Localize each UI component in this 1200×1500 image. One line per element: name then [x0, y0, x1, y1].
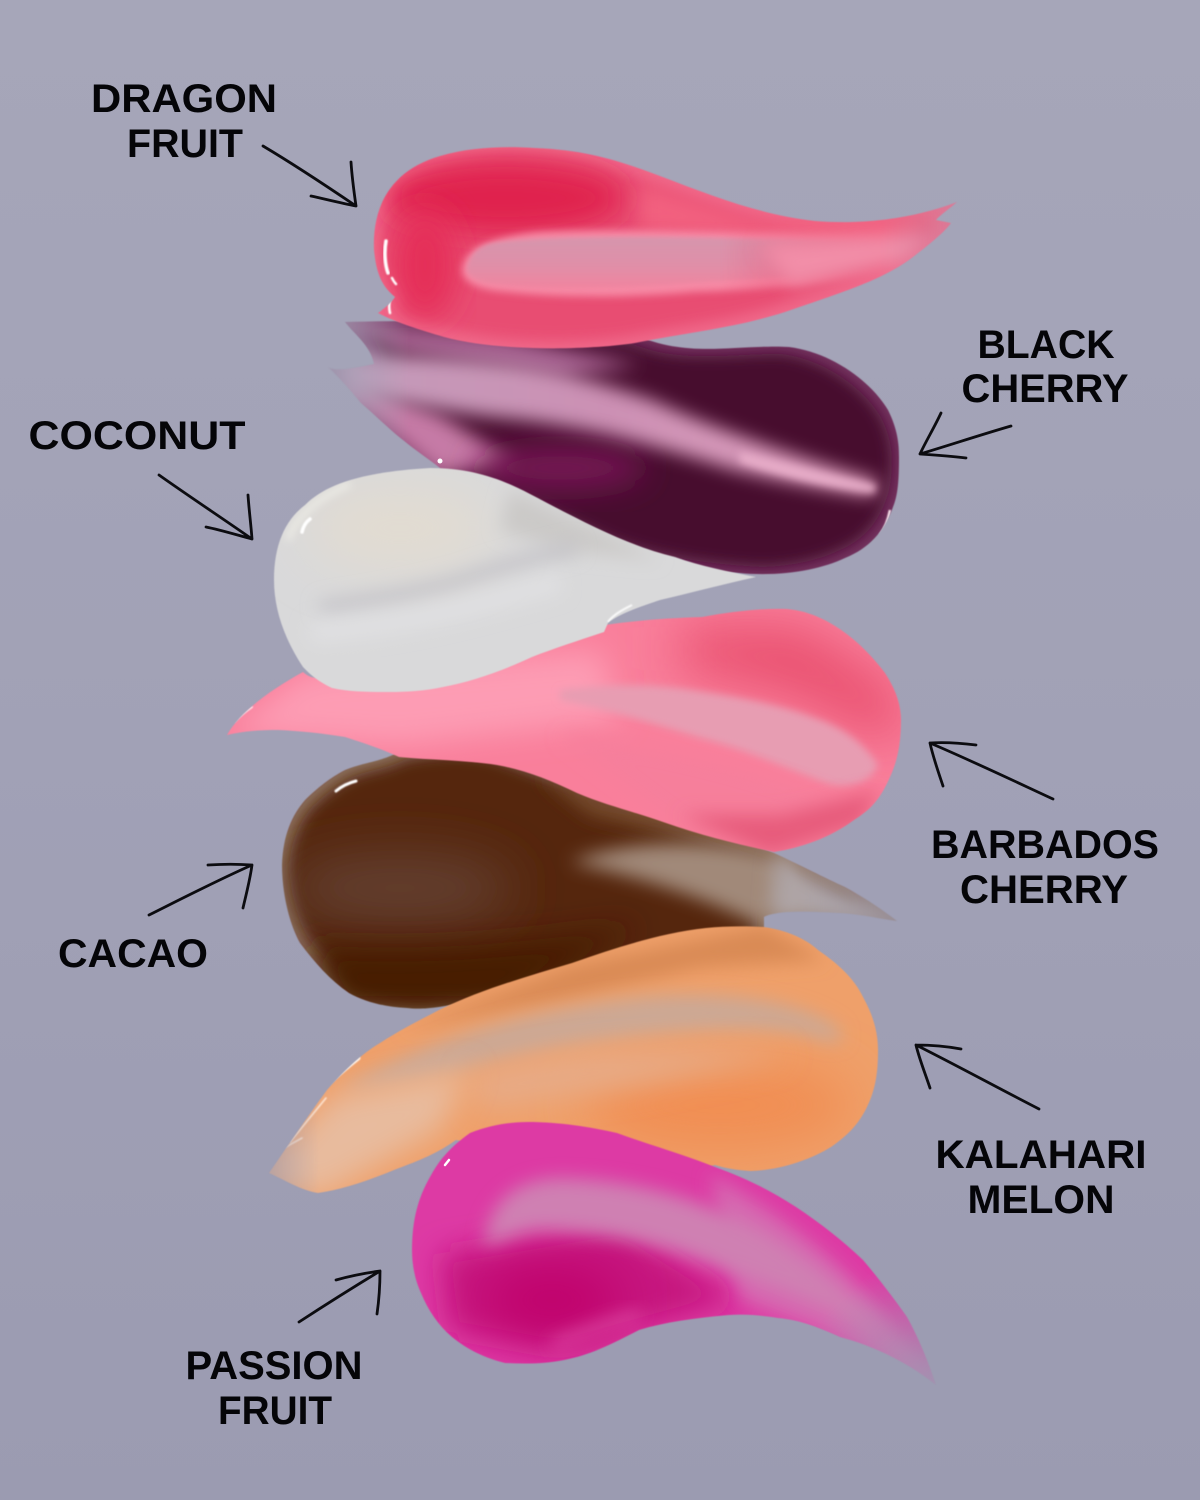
swatch: coconut	[270, 465, 760, 695]
label: barbados cherry: CHERRY	[960, 868, 1128, 912]
arrow: dragon fruit	[263, 146, 356, 206]
label: dragon fruit	[91, 77, 277, 166]
arrow: kalahari melon	[916, 1045, 1039, 1109]
arrow: black cherry	[920, 413, 1011, 458]
label: dragon fruit: FRUIT	[127, 122, 243, 166]
arrow: passion fruit	[299, 1271, 380, 1322]
label: kalahari melon: KALAHARI	[936, 1133, 1146, 1177]
label: coconut: COCONUT	[28, 414, 246, 458]
label: black cherry: BLACK	[978, 323, 1115, 367]
arrow: coconut	[159, 475, 252, 539]
label: kalahari melon	[936, 1133, 1146, 1222]
swatch: kalahari melon	[255, 920, 887, 1200]
label: passion fruit: FRUIT	[218, 1389, 332, 1433]
swatch: passion fruit	[405, 1115, 945, 1395]
swatch: dragon fruit	[373, 146, 956, 349]
arrow: barbados cherry	[930, 743, 1053, 799]
label: kalahari melon: MELON	[968, 1178, 1114, 1222]
label: cacao: CACAO	[58, 932, 208, 976]
label: black cherry	[962, 323, 1129, 411]
label: barbados cherry: BARBADOS	[931, 823, 1159, 867]
swatch: cacao	[275, 745, 905, 1015]
label: black cherry: CHERRY	[962, 367, 1129, 411]
label: barbados cherry	[931, 823, 1159, 912]
label: passion fruit	[186, 1344, 362, 1433]
arrow: cacao	[149, 864, 252, 915]
swatch: barbados cherry	[220, 600, 910, 860]
label: dragon fruit: DRAGON	[91, 77, 277, 121]
swatch: black cherry	[330, 320, 900, 575]
label: passion fruit: PASSION	[186, 1344, 362, 1388]
